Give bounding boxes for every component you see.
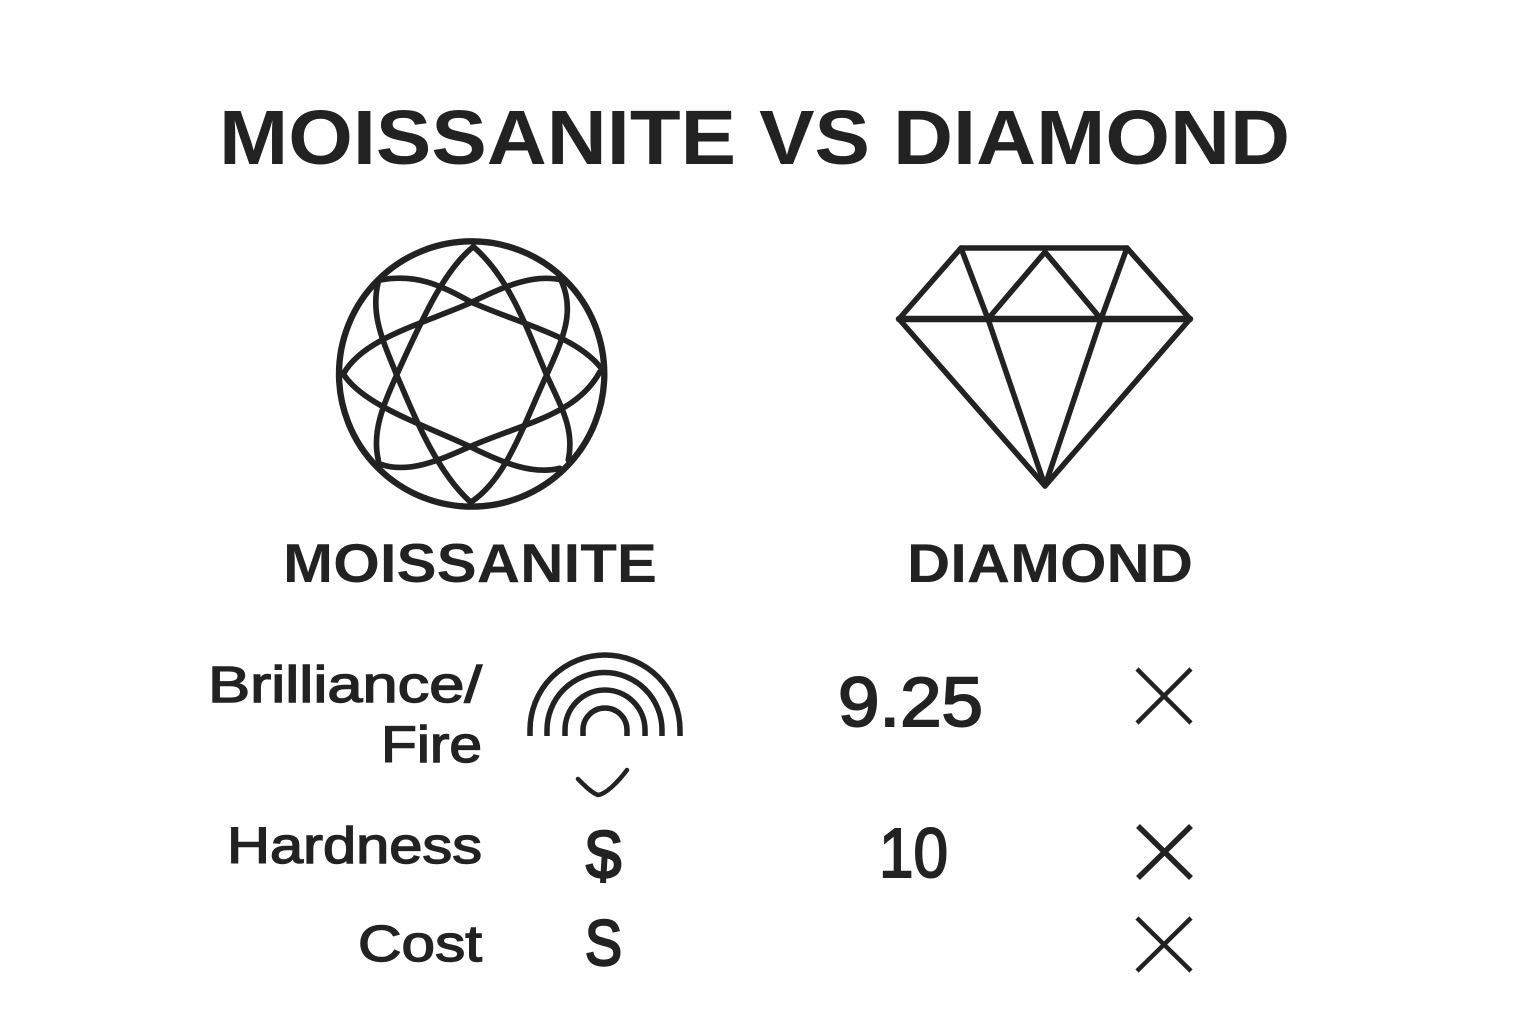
icon: diamond: [899, 248, 1190, 486]
icon: rainbow arcs: [530, 655, 680, 736]
row label: brilliance/fire: Fire: [381, 716, 482, 773]
row label: hardness: Hardness: [227, 817, 482, 874]
icon: moissanite round brilliant: [339, 241, 604, 507]
title: MOISSANITE VS DIAMOND: [219, 95, 1290, 181]
row label: brilliance/fire: [208, 656, 483, 773]
value: 9.25: 9.25: [838, 663, 983, 741]
row label: brilliance/fire: Brilliance/: [208, 656, 483, 713]
value: 10: 10: [879, 814, 948, 892]
icon: dollar sign: S: [584, 817, 623, 891]
icon: cross row 3: [1137, 918, 1191, 971]
icon: cross row 1: [1137, 669, 1191, 723]
icon: check mark: [578, 770, 627, 795]
icon: letter s: S: [585, 907, 622, 979]
label: diamond: DIAMOND: [907, 532, 1193, 594]
label: moissanite: MOISSANITE: [283, 532, 657, 594]
icon: cross row 2: [1138, 826, 1191, 878]
row label: cost: Cost: [358, 915, 482, 972]
